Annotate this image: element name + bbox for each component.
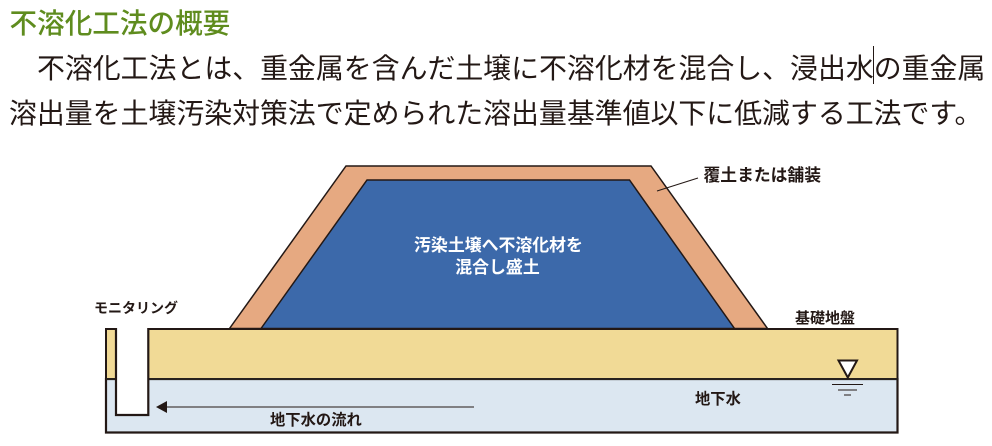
water table line — [106, 378, 898, 380]
foundation ground layer — [106, 329, 898, 379]
contaminated soil mixed with insolubilizer — [261, 180, 734, 328]
intro text block: 溶出量を土壌汚染対策法で定められた溶出量基準値以下に低減する工法です。 — [9, 98, 982, 129]
arrow: groundwater flow — [156, 401, 474, 413]
text cursor line — [872, 46, 874, 84]
embankment cover layer — [230, 166, 768, 328]
label: groundwater: 地下水 — [695, 391, 741, 408]
intro text block — [9, 53, 985, 129]
groundwater layer — [106, 379, 898, 432]
label: contaminated soil: 汚染土壌へ不溶化材を — [414, 236, 583, 255]
foundation top line — [148, 328, 898, 330]
icon: water level marker — [832, 360, 863, 395]
leader line for cover — [657, 178, 698, 191]
title: 不溶化工法の概要 — [10, 8, 230, 38]
monitoring well — [116, 326, 148, 415]
label: groundwater flow: 地下水の流れ — [270, 412, 362, 429]
label: monitoring: モニタリング — [94, 300, 178, 316]
label: cover soil or pavement: 覆土または舗装 — [704, 165, 821, 185]
intro text block: 不溶化工法とは、重金属を含んだ土壌に不溶化材を混合し、浸出水の重金属 — [37, 53, 985, 84]
label: foundation ground: 基礎地盤 — [795, 309, 855, 327]
label: mixing and mounding: 混合し盛土 — [455, 257, 540, 277]
